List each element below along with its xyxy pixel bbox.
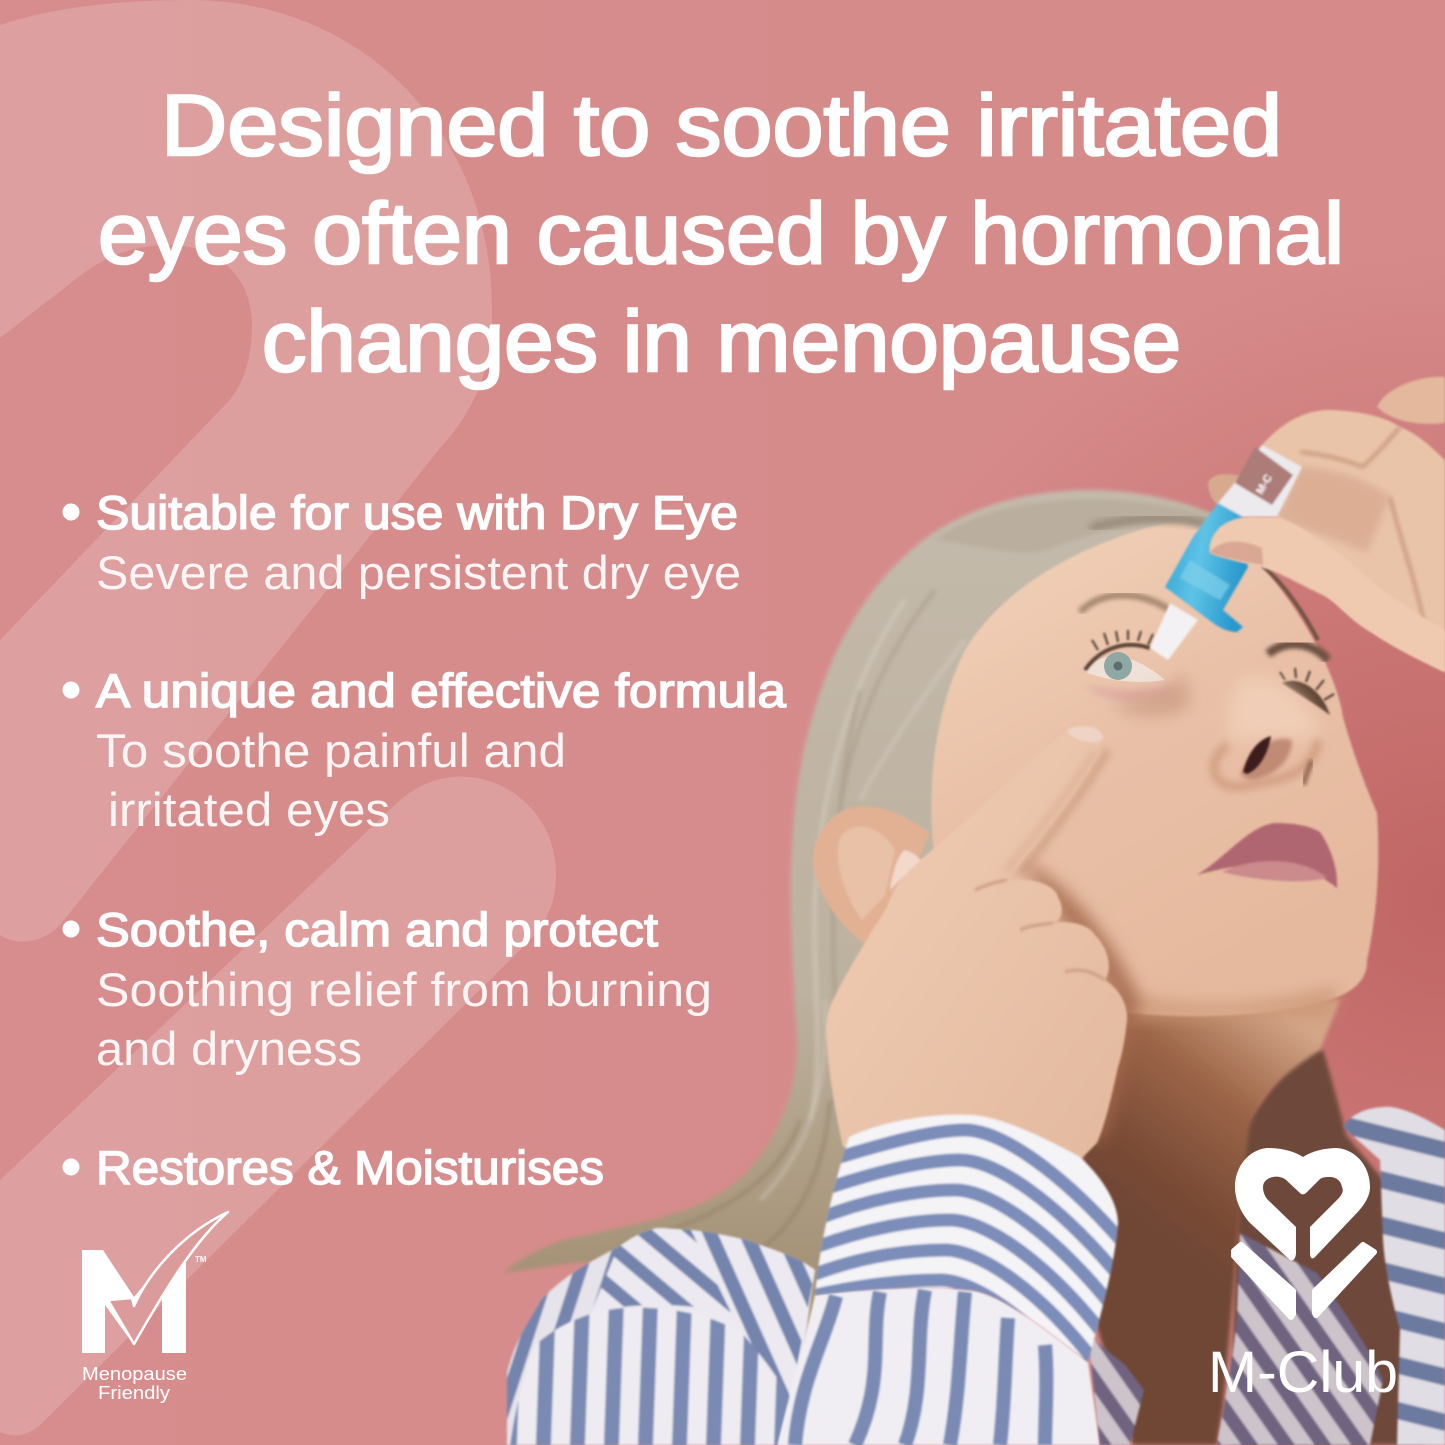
bottle highlight	[1180, 560, 1230, 600]
under-eye shade	[1110, 672, 1190, 716]
left brow	[1080, 595, 1170, 612]
thumbnail	[1210, 542, 1263, 565]
logo caption	[82, 1364, 187, 1403]
finger shading	[1005, 750, 1096, 872]
benefit 3: Soothe, calm and protect	[96, 903, 658, 956]
nose	[1229, 678, 1318, 745]
thumb nail	[890, 850, 920, 890]
title: Designed to soothe irritated	[161, 78, 1282, 174]
forehead hairline right	[1262, 565, 1318, 640]
hair front top	[935, 499, 1220, 553]
benefit 1: Severe and persistent dry eye	[96, 546, 741, 599]
nostril	[1243, 736, 1271, 774]
eye dropper bottle	[1150, 445, 1302, 660]
middle fingertip	[1208, 474, 1290, 515]
lips	[1197, 823, 1337, 888]
logo caption: Friendly	[98, 1383, 170, 1403]
right chevron	[1315, 1245, 1374, 1315]
logo caption: Menopause	[82, 1364, 187, 1384]
raised hand	[1208, 377, 1445, 672]
sleeve cuff	[814, 1113, 1120, 1362]
cap label	[1235, 447, 1293, 505]
hair	[503, 490, 1215, 1330]
benefit 2: To soothe painful and	[96, 724, 566, 777]
trademark: TM	[195, 1255, 207, 1264]
letter M	[82, 1250, 186, 1353]
top finger	[1377, 377, 1445, 424]
white cap	[1218, 445, 1302, 517]
face	[931, 515, 1378, 1016]
heart mark	[1235, 1148, 1370, 1261]
benefit 1	[62, 486, 741, 599]
benefit 3	[62, 903, 712, 1075]
benefit 2	[62, 664, 787, 836]
logo: Menopause Friendly	[82, 1212, 228, 1403]
middle finger behind dropper	[1277, 467, 1390, 553]
benefit 3: Soothing relief from burning	[96, 963, 712, 1016]
logo: M-Club	[1208, 1148, 1398, 1405]
benefit 2: A unique and effective formula	[96, 664, 787, 717]
knuckle shading	[975, 880, 1105, 980]
ear	[813, 807, 930, 947]
jaw shade	[1100, 985, 1340, 1020]
benefit 1: Suitable for use with Dry Eye	[96, 486, 738, 539]
background watermark: enlarged logo shape	[0, 0, 556, 1435]
nose edge crease	[1304, 760, 1312, 785]
nose underside	[1240, 739, 1292, 780]
nose wing outline	[1214, 740, 1318, 787]
neck	[1083, 1000, 1340, 1445]
index fingernail	[1067, 726, 1103, 742]
palm	[1262, 410, 1445, 672]
benefit 4: Restores & Moisturises	[96, 1141, 604, 1194]
wordmark: M-Club	[1208, 1340, 1398, 1405]
left eye	[1085, 630, 1175, 700]
nozzle	[1150, 603, 1198, 660]
left chevron	[1234, 1245, 1293, 1317]
right shirt	[1343, 1107, 1445, 1445]
cap label: M-C	[1254, 472, 1275, 496]
face shadow beside hand	[1020, 860, 1140, 1140]
title	[98, 78, 1344, 390]
back hair right of neck	[1230, 1050, 1425, 1445]
collar shirt under neck	[1217, 1233, 1383, 1445]
tick	[108, 1212, 228, 1344]
photo: woman applying eye drops	[503, 377, 1445, 1445]
right brow	[1268, 644, 1328, 660]
sleeve vertical stripes	[795, 1290, 1046, 1445]
left shoulder shirt	[507, 1228, 815, 1445]
hand on cheek	[826, 726, 1127, 1160]
dark roots along forehead	[1090, 518, 1205, 528]
title: changes in menopause	[262, 294, 1181, 390]
shirt collar piece	[1088, 1335, 1144, 1445]
title: eyes often caused by hormonal	[98, 186, 1344, 282]
benefit 2: irritated eyes	[108, 783, 390, 836]
finger cast shadow	[1020, 750, 1108, 875]
palm crease	[1300, 427, 1430, 655]
thumb over bottle	[1209, 517, 1445, 672]
sleeve lower panel	[778, 1288, 1100, 1445]
benefit 3: and dryness	[96, 1022, 362, 1075]
right eye	[1280, 668, 1334, 715]
hair strands	[620, 590, 965, 1250]
bottle body	[1165, 503, 1248, 632]
